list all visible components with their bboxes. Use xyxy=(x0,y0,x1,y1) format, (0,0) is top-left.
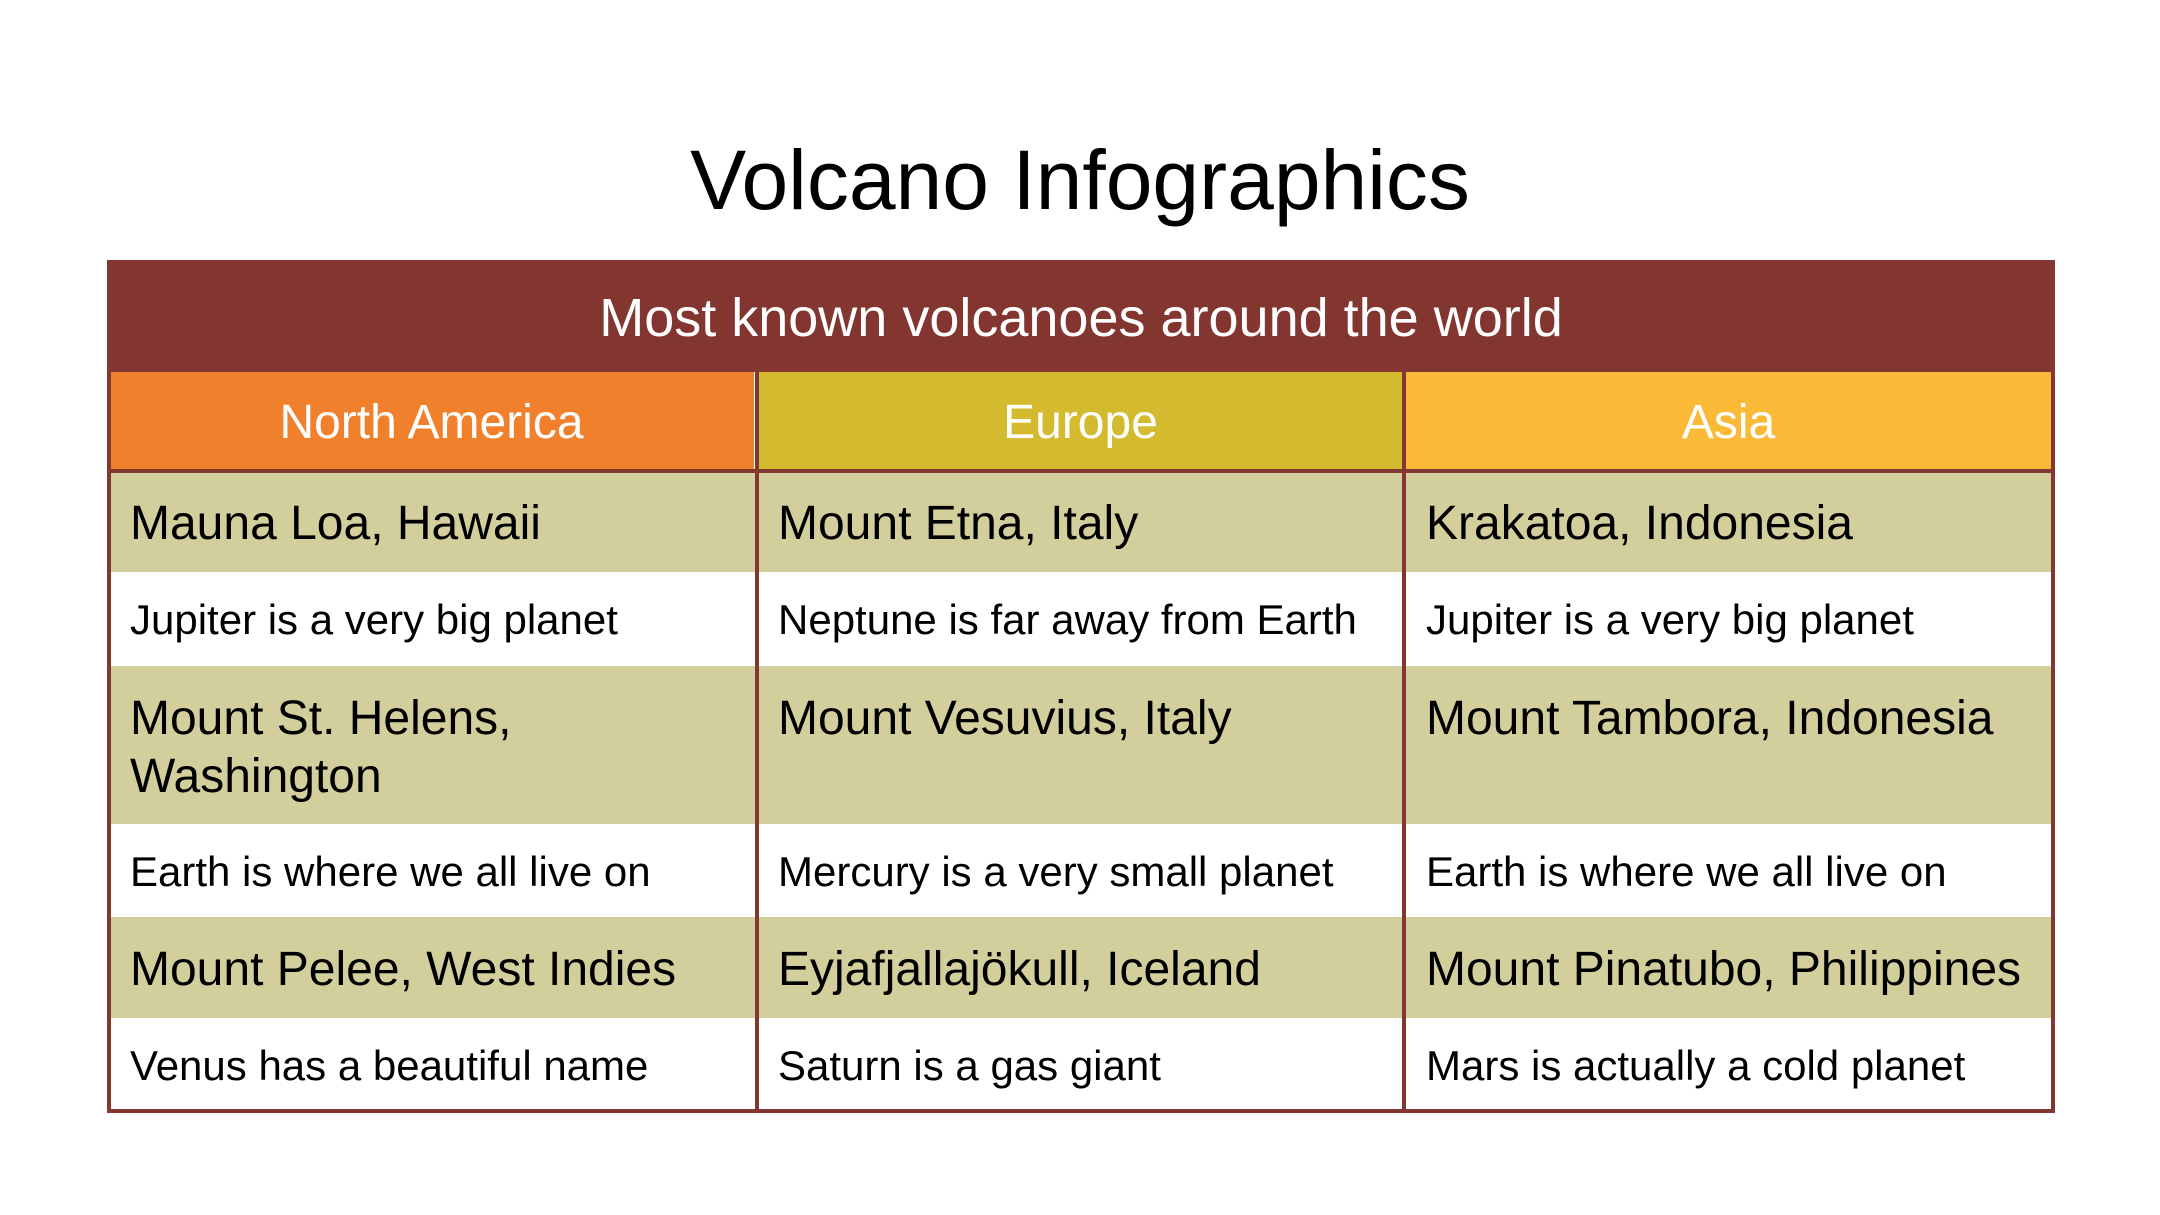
volcano: Mauna Loa: Mauna Loa, Hawaii xyxy=(130,497,541,550)
volcano: Mount Tambora: Mount Tambora, Indonesia xyxy=(1426,692,1993,745)
table banner heading xyxy=(107,260,2055,372)
volcano: Mount Pinatubo: Mount Pinatubo, Philippines xyxy=(1426,943,2021,996)
column heading: North America xyxy=(109,372,754,469)
title: Volcano Infographics xyxy=(690,133,1470,227)
description: Jupiter, column 3: Jupiter is a very big planet xyxy=(1426,596,1914,643)
description: Mercury: Mercury is a very small planet xyxy=(778,848,1334,895)
volcano: Eyjafjallajökull: Eyjafjallajökull, Iceland xyxy=(778,943,1261,996)
volcano: Mount Vesuvius: Mount Vesuvius, Italy xyxy=(778,692,1232,745)
volcano: Mount St. Helens: Mount St. Helens, xyxy=(130,692,512,745)
column heading: North America: North America xyxy=(279,396,584,449)
row band: volcano row 1 xyxy=(107,473,2055,572)
description: Mars: Mars is actually a cold planet xyxy=(1426,1042,1965,1089)
column heading: Europe xyxy=(759,372,1402,469)
row band: volcano row 3 xyxy=(107,917,2055,1018)
description: Earth, column 1: Earth is where we all live on xyxy=(130,848,651,895)
volcano: Krakatoa: Krakatoa, Indonesia xyxy=(1426,497,1853,550)
column heading: Europe: Europe xyxy=(1003,396,1158,449)
description: Venus: Venus has a beautiful name xyxy=(130,1042,648,1089)
description: Saturn: Saturn is a gas giant xyxy=(778,1042,1161,1089)
volcano: Mount Pelee: Mount Pelee, West Indies xyxy=(130,943,676,996)
description: Neptune: Neptune is far away from Earth xyxy=(778,596,1357,643)
volcano: Mount St. Helens xyxy=(130,692,512,803)
volcano: Mount St. Helens: Washington xyxy=(130,750,382,803)
volcano: Mount Etna: Mount Etna, Italy xyxy=(778,497,1138,550)
panel: volcano table xyxy=(107,260,2055,1113)
column heading: Asia: Asia xyxy=(1682,396,1775,449)
row band: volcano row 2 xyxy=(107,666,2055,824)
column heading: Asia xyxy=(1406,372,2051,469)
description: Jupiter, column 1: Jupiter is a very big planet xyxy=(130,596,618,643)
description: Earth, column 3: Earth is where we all live on xyxy=(1426,848,1947,895)
table banner heading: Most known volcanoes around the world xyxy=(599,288,1563,348)
